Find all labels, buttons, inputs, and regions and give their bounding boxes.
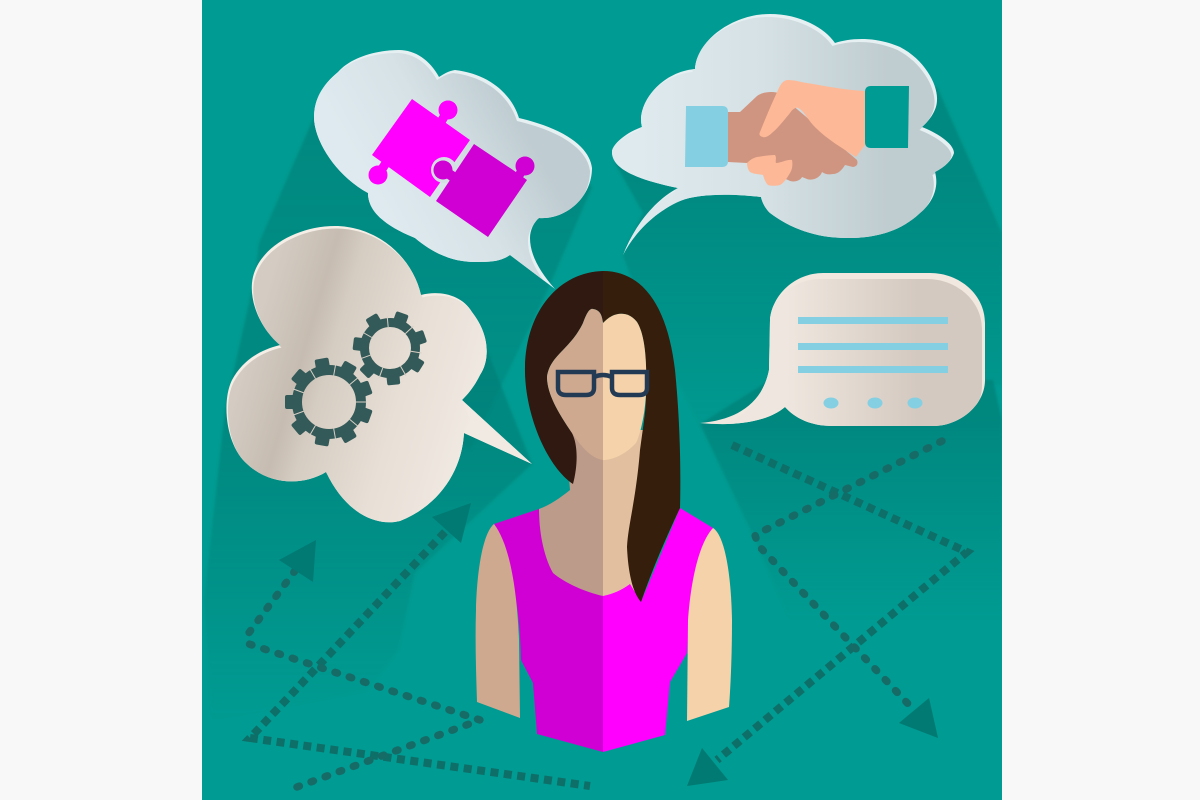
left hand: sleeve blue xyxy=(685,106,728,167)
puzzle piece: dark xyxy=(434,144,534,237)
text line 2 xyxy=(798,343,948,350)
light hand xyxy=(759,80,865,157)
text line 3 xyxy=(798,366,948,373)
face xyxy=(547,309,646,460)
long shadows behind bubbles xyxy=(204,87,1002,720)
arrowhead: left short xyxy=(279,540,316,582)
left arm xyxy=(476,524,520,718)
ellipsis dots xyxy=(824,398,922,408)
hair: left half xyxy=(525,271,603,484)
puzzle gap xyxy=(431,157,457,183)
neck and chest xyxy=(539,430,648,600)
puzzle piece: bright xyxy=(368,99,470,197)
arrowhead: right lower-right xyxy=(899,698,938,738)
dotted path: left group xyxy=(248,532,590,787)
dotted path: right group xyxy=(717,441,967,760)
teal background panel xyxy=(202,0,1002,800)
infographic illustration xyxy=(202,0,1002,800)
woman figure xyxy=(476,271,732,752)
text line 1 xyxy=(798,317,948,324)
glasses xyxy=(558,372,647,395)
gear: small xyxy=(352,311,427,385)
right hand: sleeve teal xyxy=(865,86,909,148)
dark hand xyxy=(728,92,858,181)
right arm xyxy=(687,528,732,721)
arrowhead: left long xyxy=(432,503,471,543)
gear: large xyxy=(285,357,373,447)
dress xyxy=(494,508,713,752)
speech bubble: gears xyxy=(226,226,532,522)
speech bubble: handshake xyxy=(612,14,954,255)
light thumb xyxy=(747,155,792,186)
arrowhead: right lower-left xyxy=(687,748,728,786)
hair: right half xyxy=(603,271,680,602)
speech bubble: text lines xyxy=(700,273,985,426)
speech bubble: puzzle xyxy=(314,50,592,289)
